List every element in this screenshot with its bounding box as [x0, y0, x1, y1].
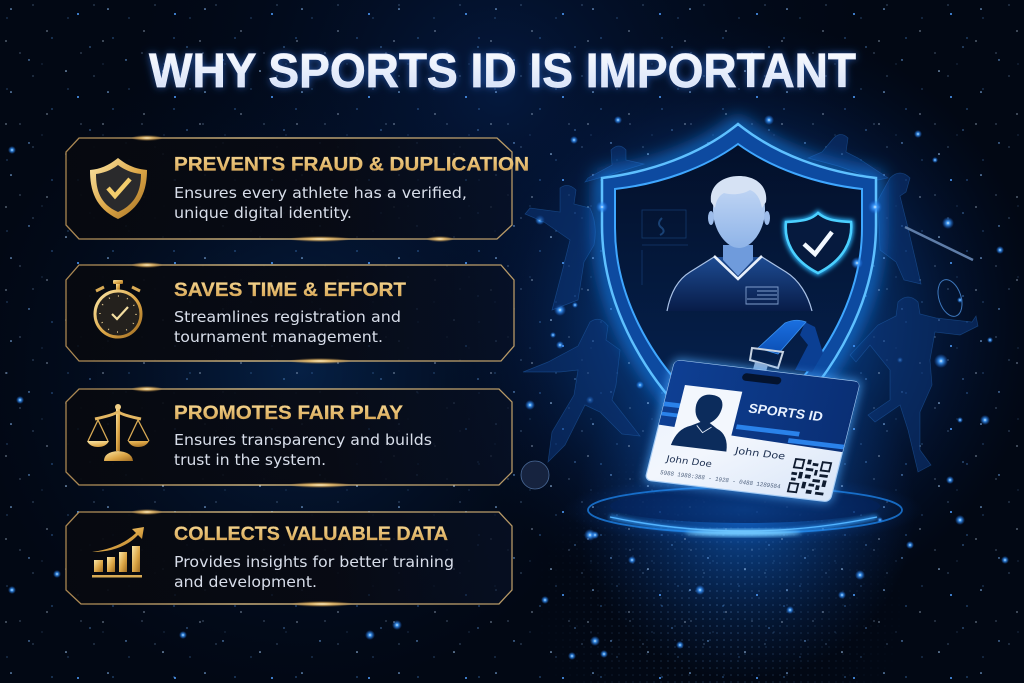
- heading: COLLECTS VALUABLE DATA: [174, 523, 448, 545]
- card title: SPORTS ID: [747, 401, 825, 424]
- name left: John Doe: [664, 455, 713, 470]
- glowing platform: [563, 474, 923, 546]
- athlete: top left pitcher: [525, 185, 595, 310]
- icon: scales of justice: [87, 404, 149, 461]
- description: Streamlines registration and: [174, 308, 401, 326]
- panel: prevents fraud and duplication: [66, 135, 529, 242]
- icon: growth chart: [92, 527, 144, 578]
- description: and development.: [174, 573, 317, 591]
- icon: stopwatch: [95, 280, 141, 337]
- photo placeholder: [670, 385, 742, 452]
- athlete: soccer player with ball: [521, 319, 640, 489]
- card header band: [657, 360, 860, 452]
- lanyard strap: [750, 320, 823, 375]
- description: tournament management.: [174, 328, 383, 346]
- panel: promotes fair play: [66, 386, 512, 488]
- big blue shield: [596, 124, 882, 460]
- heading: PROMOTES FAIR PLAY: [174, 402, 403, 424]
- title: WHY SPORTS ID IS IMPORTANT: [149, 45, 856, 98]
- description: Ensures every athlete has a verified,: [174, 184, 467, 202]
- panel: saves time and effort: [66, 262, 514, 364]
- athlete: upper right behind shield: [808, 134, 888, 180]
- icon: gold shield with check: [90, 158, 147, 219]
- panel: collects valuable data: [66, 509, 512, 607]
- description: Provides insights for better training: [174, 553, 454, 571]
- athlete: upper left behind shield: [585, 146, 644, 182]
- name right: John Doe: [733, 446, 787, 462]
- athlete: batter with bat: [878, 173, 973, 284]
- athlete silhouettes: [521, 134, 978, 489]
- ID number: 5988 1988:388 - 1928 - 0488 1289584: [659, 469, 782, 490]
- athlete: tennis player with racket: [850, 277, 978, 472]
- description: trust in the system.: [174, 451, 326, 469]
- heading: PREVENTS FRAUD & DUPLICATION: [174, 154, 529, 176]
- faint shield panels: [642, 210, 688, 285]
- QR code: [787, 458, 832, 496]
- description: Ensures transparency and builds: [174, 431, 432, 449]
- ID card: [643, 358, 862, 504]
- description: unique digital identity.: [174, 204, 352, 222]
- small check shield: [786, 213, 851, 273]
- person avatar: [667, 176, 812, 311]
- heading: SAVES TIME & EFFORT: [174, 279, 406, 301]
